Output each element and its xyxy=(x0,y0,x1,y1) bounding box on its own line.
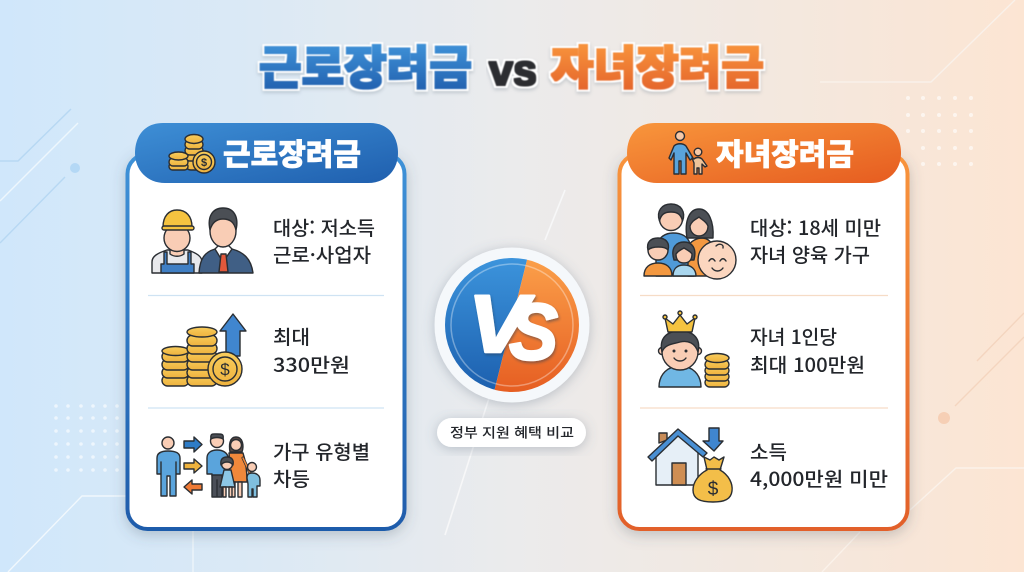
row: household types xyxy=(157,434,370,497)
VS badge xyxy=(434,248,590,402)
VS badge: S xyxy=(509,287,558,376)
icon: coins: $ xyxy=(201,157,207,169)
panel card xyxy=(620,154,908,529)
text: income limit: 소득 xyxy=(750,436,787,465)
text: amount per child: 자녀 1인당 xyxy=(750,321,837,350)
icon: coins with up arrow: $ xyxy=(220,360,230,379)
title: 자녀장려금 xyxy=(551,42,764,94)
icon: coins xyxy=(169,134,215,173)
panel: 자녀장려금 xyxy=(620,123,908,529)
panel header xyxy=(135,123,398,183)
row: eligibility xyxy=(152,208,375,273)
title: vs xyxy=(489,46,537,95)
header text: 자녀장려금 xyxy=(716,130,854,174)
icon: crowned child with coins xyxy=(658,311,729,387)
text: maximum amount: 최대 xyxy=(273,321,310,350)
text: eligibility: 근로·사업자 xyxy=(273,239,371,268)
icon: house and money bag xyxy=(648,428,732,502)
text: eligibility: 대상: 저소득 xyxy=(273,212,375,241)
text: eligibility: 대상: 18세 미만 xyxy=(750,212,881,241)
row: amount per child xyxy=(658,311,865,387)
row: eligibility xyxy=(644,204,881,279)
text: household types: 차등 xyxy=(273,463,310,492)
panel: 근로장려금 xyxy=(128,123,404,529)
panel card xyxy=(128,154,404,529)
text: income limit: 4,000만원 미만 xyxy=(750,463,888,492)
icon: coins with up arrow xyxy=(162,314,246,386)
title xyxy=(259,42,764,95)
title: 근로장려금 xyxy=(259,42,472,94)
text: eligibility: 자녀 양육 가구 xyxy=(750,239,870,268)
text: household types: 가구 유형별 xyxy=(273,436,370,465)
callout: 정부 지원 혜택 비교: 정부 지원 혜택 비교 xyxy=(450,422,574,442)
panel header xyxy=(627,123,901,183)
text: maximum amount: 330만원 xyxy=(273,349,350,378)
row: maximum amount xyxy=(162,314,350,386)
icon: worker and business owner xyxy=(152,208,253,273)
callout: 정부 지원 혜택 비교 xyxy=(437,418,586,447)
icon: family with baby xyxy=(644,204,736,279)
VS badge: V xyxy=(468,279,535,370)
header text: 근로장려금 xyxy=(223,130,361,174)
row: income limit xyxy=(648,428,888,502)
icon: house and money bag: $ xyxy=(708,479,719,500)
icon: household arrows and family xyxy=(157,434,260,497)
text: amount per child: 최대 100만원 xyxy=(750,349,865,378)
icon: parent and child xyxy=(669,132,707,174)
